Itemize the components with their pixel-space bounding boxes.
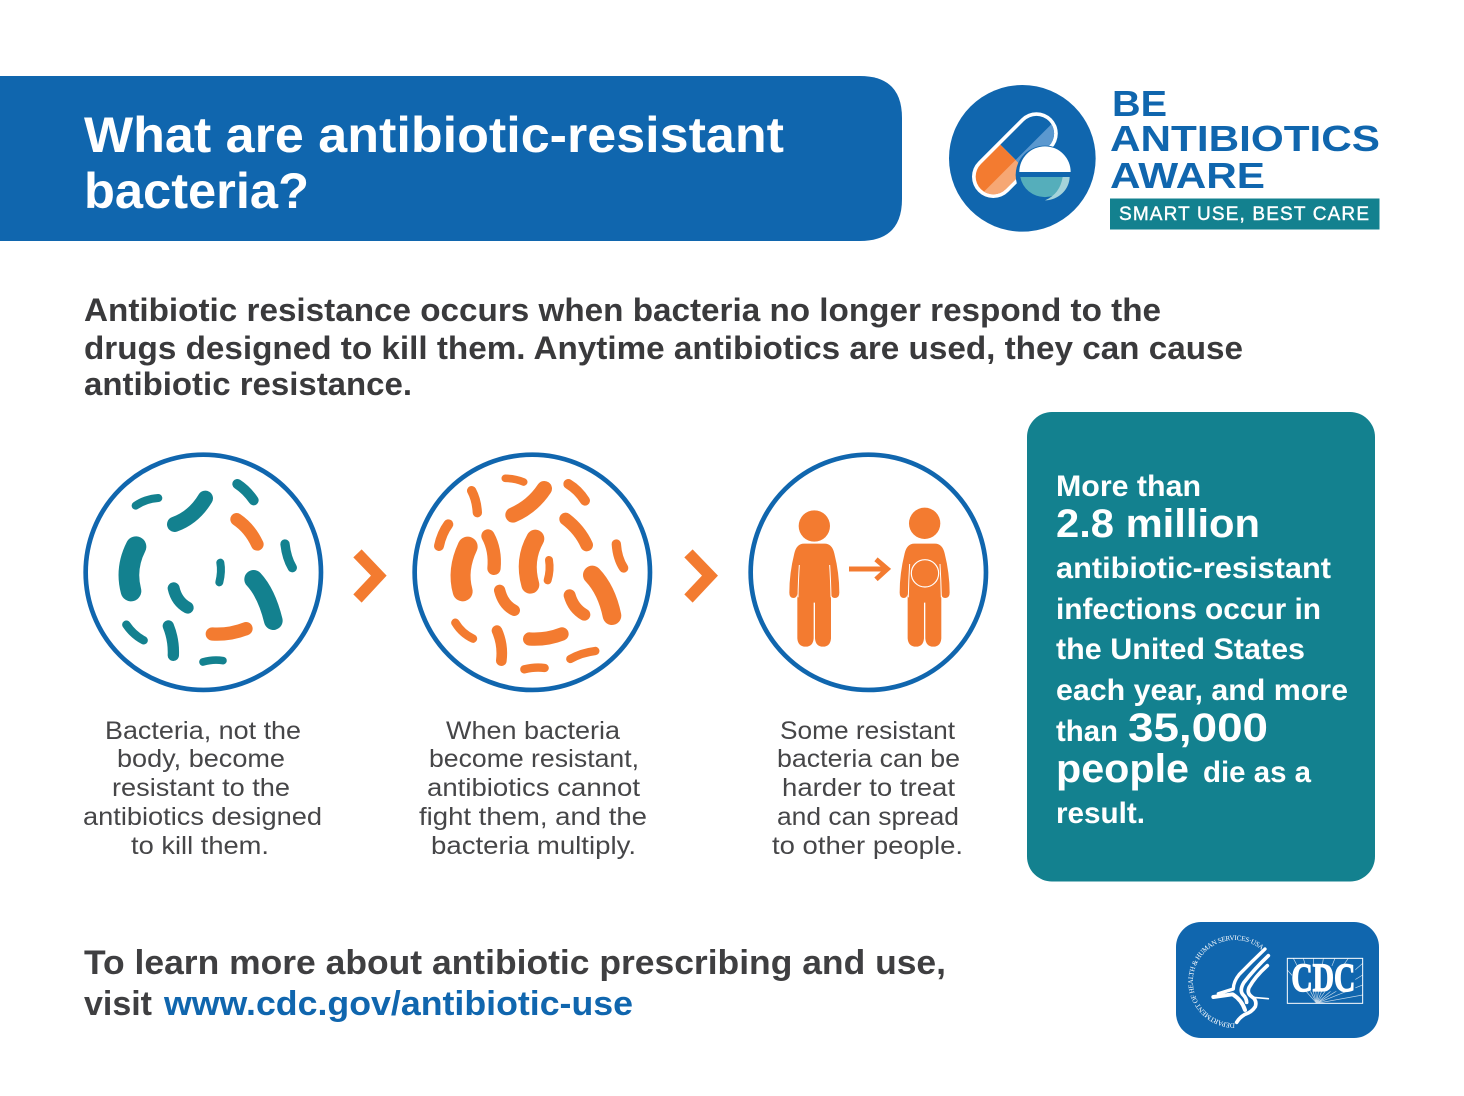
caption: step 3: and can spread <box>777 803 959 831</box>
caption: step 3: to other people. <box>772 832 963 860</box>
caption: step 2: become resistant, <box>429 745 639 773</box>
logo: HHS and CDC <box>1176 922 1379 1038</box>
callout text: than <box>1056 715 1118 748</box>
footer call to action: www.cdc.gov/antibiotic-use <box>163 985 633 1023</box>
title <box>84 107 784 219</box>
callout text: die as a <box>1203 756 1311 789</box>
footer call to action: To learn more about antibiotic prescribing and use, <box>84 944 946 982</box>
callout text <box>1056 470 1348 830</box>
person left <box>789 510 839 647</box>
icon: pill and tablet <box>949 85 1096 232</box>
header banner <box>0 76 902 241</box>
caption: step 3: Some resistant <box>780 717 955 745</box>
caption: step 1: body, become <box>117 745 285 773</box>
title: bacteria? <box>84 163 309 219</box>
title: What are antibiotic-resistant <box>84 107 784 163</box>
callout text: antibiotic-resistant <box>1056 552 1331 585</box>
footer call to action <box>84 944 946 1023</box>
tagline: SMART USE, BEST CARE <box>1119 204 1369 225</box>
caption: step 2: fight them, and the <box>419 803 647 831</box>
panel: statistics callout <box>1027 412 1375 882</box>
icon: resistant bacteria spreading between people <box>751 455 986 690</box>
callout text: result. <box>1056 797 1145 830</box>
callout text: infections occur in <box>1056 593 1321 626</box>
caption: step 1: to kill them. <box>131 832 269 860</box>
caption: step 3 <box>772 717 963 860</box>
callout text: each year, and more <box>1056 674 1348 707</box>
logo wordmark <box>1110 83 1380 196</box>
caption: step 1: resistant to the <box>112 774 290 802</box>
icon: HHS eagle seal: DEPARTMENT OF HEALTH & HUMAN SERVICES·USA <box>1188 935 1263 1028</box>
CDC mark: CDC <box>1291 955 1355 1000</box>
arrow: step 2 to step 3 <box>684 549 718 603</box>
callout text: the United States <box>1056 633 1305 666</box>
caption: step 3: harder to treat <box>782 774 955 802</box>
caption: step 2 <box>419 717 647 860</box>
callout text: 35,000 <box>1128 706 1268 750</box>
caption: step 2: When bacteria <box>446 717 620 745</box>
callout text: people <box>1056 747 1189 791</box>
caption: step 1 <box>83 717 322 860</box>
caption: step 1: antibiotics designed <box>83 803 322 831</box>
logo wordmark: AWARE <box>1110 155 1265 196</box>
arrow: step 1 to step 2 <box>353 549 387 603</box>
callout text: 2.8 million <box>1056 502 1260 546</box>
caption: step 2: antibiotics cannot <box>427 774 640 802</box>
person right with infection <box>900 508 950 647</box>
tagline <box>1110 198 1380 230</box>
callout text: More than <box>1056 470 1201 503</box>
footer call to action: visit <box>84 985 152 1023</box>
intro paragraph: antibiotic resistance. <box>84 366 412 402</box>
intro paragraph <box>84 292 1243 402</box>
icon: bacteria circle, step 1 <box>86 455 321 690</box>
icon: bacteria circle, step 2 <box>415 455 650 690</box>
intro paragraph: drugs designed to kill them. Anytime antibiotics are used, they can cause <box>84 330 1243 366</box>
caption: step 3: bacteria can be <box>777 745 960 773</box>
intro paragraph: Antibiotic resistance occurs when bacteria no longer respond to the <box>84 292 1161 328</box>
caption: step 1: Bacteria, not the <box>105 717 301 745</box>
caption: step 2: bacteria multiply. <box>431 832 636 860</box>
logo wordmark: BE <box>1112 83 1167 124</box>
arrow between people <box>849 559 887 579</box>
logo wordmark: ANTIBIOTICS <box>1110 118 1380 159</box>
logo: Be Antibiotics Aware <box>949 83 1380 232</box>
